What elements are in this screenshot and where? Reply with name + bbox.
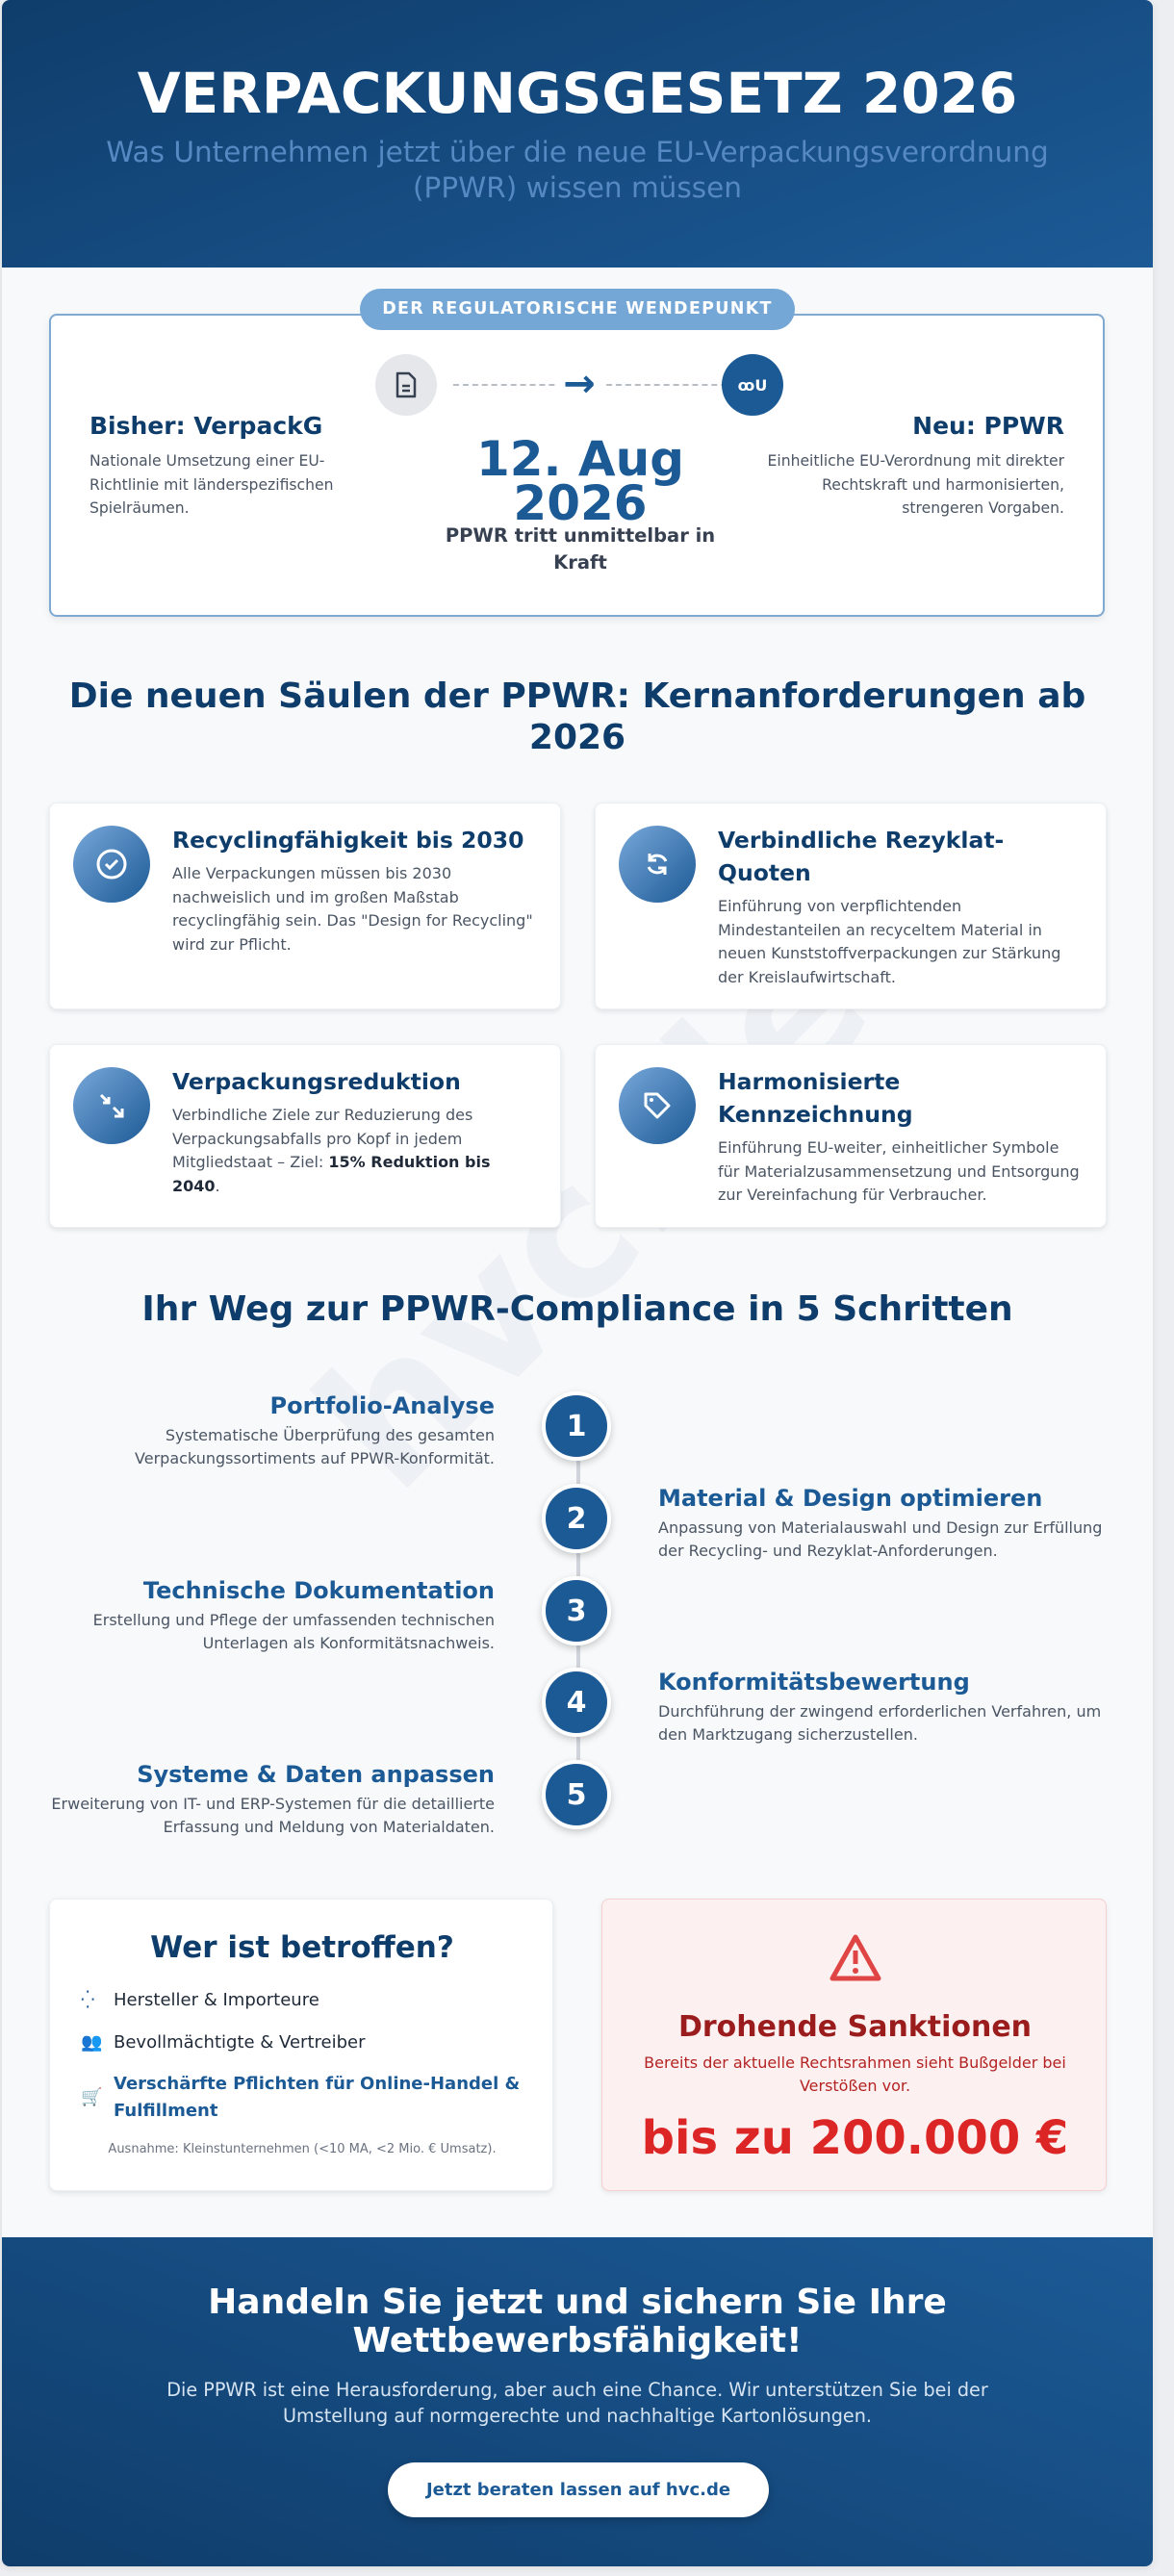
step 3 — [542, 1576, 611, 1645]
left text: Nationale Umsetzung einer EU-Richtlinie mit länderspezifischen Spielräumen. — [89, 452, 333, 517]
text — [166, 2379, 988, 2427]
step 1 — [542, 1391, 611, 1461]
step 1: 1 — [567, 1409, 586, 1443]
right text — [768, 412, 1064, 517]
card: rezyklat: Einführung von verpflichtenden Mindestanteilen an recyceltem Material in neuen Kunststoffverpackungen zur Stärkung der Kreislaufwirtschaft. — [718, 897, 1060, 985]
list: Bevollmächtigte & Vertreiber — [114, 2032, 365, 2053]
right text: Einheitliche EU-Verordnung mit direkter Rechtskraft und harmonisierten, strengeren Vorgaben. — [768, 452, 1064, 517]
timeline: Portfolio-Analyse — [269, 1392, 495, 1419]
button — [388, 2462, 769, 2517]
timeline: Material & Design optimieren — [658, 1485, 1042, 1512]
date: 12. Aug — [476, 431, 684, 487]
step 3: 3 — [567, 1594, 586, 1628]
date: 2026 — [513, 475, 648, 531]
icon: recycle — [619, 826, 696, 903]
icon: EU: ꝏU — [738, 375, 767, 395]
watermark: hvc.de — [277, 897, 909, 1529]
panel: regulatory turning point: → — [563, 362, 596, 406]
text: Die PPWR ist eine Herausforderung, aber auch eine Chance. Wir unterstützen Sie bei der — [166, 2379, 988, 2401]
card: recycling — [49, 803, 561, 1009]
timeline: Systematische Überprüfung des gesamten Verpackungssortiments auf PPWR-Konformität. — [135, 1426, 495, 1467]
footer CTA — [2, 2237, 1153, 2566]
list: 🛒 — [81, 2087, 102, 2107]
list — [81, 1990, 520, 2121]
card: labelling: Einführung EU-weiter, einheitlicher Symbole für Materialzusammensetzung und Entsorgung zur Vereinfachung für Verbraucher. — [718, 1138, 1080, 1204]
list: 👥 — [81, 2032, 102, 2053]
step 2 — [542, 1484, 611, 1553]
card: labelling — [595, 1044, 1107, 1228]
card: rezyklat: Verbindliche Rezyklat-Quoten — [718, 827, 1004, 886]
icon: check — [73, 826, 150, 903]
heading: Wer ist betroffen? — [150, 1930, 454, 1965]
card: recycling: Alle Verpackungen müssen bis 2030 nachweislich und im großen Maßstab recyclingfähig sein. Das "Design for Recycling" wird zur Pflicht. — [172, 864, 533, 953]
heading: Handeln Sie jetzt und sichern Sie Ihre Wettbewerbsfähigkeit! — [208, 2283, 947, 2360]
heading: steps: Ihr Weg zur PPWR-Compliance in 5 Schritten — [141, 1289, 1013, 1329]
card: reduction: Verbindliche Ziele zur Reduzierung des Verpackungsabfalls pro Kopf in jedem Mitgliedstaat – Ziel: 15% Reduktion bis 2040. — [172, 1106, 490, 1195]
panel: sanctions — [601, 1899, 1107, 2191]
icon: warning — [829, 1934, 881, 1980]
left text: Bisher: VerpackG — [89, 412, 322, 440]
arrow — [453, 384, 765, 386]
footnote: Ausnahme: Kleinstunternehmen (<10 MA, <2 Mio. € Umsatz). — [108, 2142, 497, 2156]
step 5: 5 — [567, 1778, 586, 1811]
list: ⁛ — [81, 1990, 94, 2010]
icon: tag — [619, 1067, 696, 1144]
heading: Drohende Sanktionen — [678, 2010, 1032, 2044]
step 2: 2 — [567, 1501, 586, 1536]
subtitle: Was Unternehmen jetzt über die neue EU-Verpackungsverordnung (PPWR) wissen müssen — [106, 136, 1049, 204]
timeline: Erweiterung von IT- und ERP-Systemen für die detaillierte Erfassung und Meldung von Materialdaten. — [51, 1795, 495, 1836]
text: Bereits der aktuelle Rechtsrahmen sieht Bußgelder bei Verstößen vor. — [644, 2053, 1066, 2095]
list: Hersteller & Importeure — [114, 1990, 319, 2010]
date — [476, 431, 684, 531]
timeline: Systeme & Daten anpassen — [137, 1761, 495, 1788]
card: recycling: Recyclingfähigkeit bis 2030 — [172, 827, 523, 854]
icon: EU — [722, 354, 783, 416]
left text — [89, 412, 333, 517]
list: Verschärfte Pflichten für Online-Handel & Fulfillment — [114, 2074, 520, 2121]
card: reduction — [49, 1044, 561, 1228]
heading: pillars: Die neuen Säulen der PPWR: Kernanforderungen ab 2026 — [69, 676, 1085, 757]
step 5 — [542, 1760, 611, 1829]
timeline: Konformitätsbewertung — [658, 1669, 970, 1696]
timeline: Durchführung der zwingend erforderlichen Verfahren, um den Marktzugang sicherzustellen. — [658, 1702, 1101, 1744]
icon: document — [375, 354, 437, 416]
panel: regulatory turning point — [49, 314, 1105, 617]
badge — [360, 289, 795, 330]
timeline: Erstellung und Pflege der umfassenden technischen Unterlagen als Konformitätsnachweis. — [93, 1611, 495, 1652]
amount: bis zu 200.000 € — [642, 2111, 1068, 2165]
text: Umstellung auf normgerechte und nachhaltige Kartonlösungen. — [283, 2405, 872, 2427]
card: reduction: Verpackungsreduktion — [172, 1068, 461, 1095]
card: labelling: Harmonisierte Kennzeichnung — [718, 1068, 913, 1128]
icon: shrink arrows — [73, 1067, 150, 1144]
timeline — [51, 1391, 1102, 1836]
title: VERPACKUNGSGESETZ 2026 — [138, 61, 1017, 126]
panel: who is affected — [49, 1899, 553, 2191]
header — [2, 0, 1153, 268]
step 4: 4 — [567, 1686, 586, 1719]
date caption: PPWR tritt unmittelbar in Kraft — [446, 524, 715, 574]
card: rezyklat — [595, 803, 1107, 1009]
button: Jetzt beraten lassen auf hvc.de — [426, 2480, 730, 2500]
timeline: Anpassung von Materialauswahl und Design zur Erfüllung der Recycling- und Rezyklat-Anforderungen. — [658, 1518, 1102, 1560]
badge: DER REGULATORISCHE WENDEPUNKT — [382, 299, 773, 319]
step 4 — [542, 1668, 611, 1737]
timeline: Technische Dokumentation — [143, 1577, 495, 1604]
right text: Neu: PPWR — [912, 412, 1064, 440]
